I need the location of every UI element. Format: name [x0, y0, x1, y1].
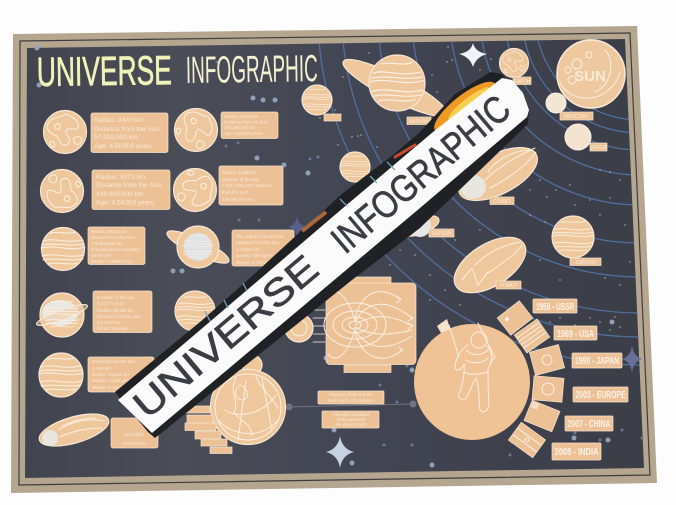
- planet: mid banded: [340, 152, 370, 182]
- comet lower: COMET: [499, 283, 518, 289]
- row 3 right: saturn and facts: Density: 687 kg/m³: [236, 253, 273, 258]
- tube printed orange planet: [428, 74, 502, 140]
- space agency year labels: 2008 - INDIA: [554, 447, 598, 458]
- space agency year labels: 2003 - EUROPE: [576, 390, 626, 401]
- row 5 left: neptune and facts: Density: 1,638 g/cm³: [92, 378, 133, 383]
- row 4 left: ringed planet and facts: Radius: 25,362 km: [97, 308, 134, 313]
- row 4 left: ringed planet and facts: [35, 291, 152, 337]
- row 1 right: planet and facts: Age: 4.503E9 years: [224, 131, 263, 136]
- row 2 right: mars and facts: Duration of the day:: [222, 177, 260, 182]
- planet: saturn small: SATURN: [431, 231, 452, 237]
- comet bottom left and facts: [36, 408, 158, 452]
- row 5 left: neptune and facts: Distance from the Sun:: [92, 359, 137, 364]
- space agency year labels: 1969 - USA: [557, 329, 594, 340]
- row 1 left: planet and facts: Distance from the Sun:: [94, 126, 161, 133]
- row 3 left: jupiter and facts: [41, 227, 145, 270]
- row 3 left: jupiter and facts: 778,500,000 km: [91, 241, 123, 246]
- row 2 right: mars and facts: 1 Sol | 106 | 687 distance: [222, 183, 272, 188]
- title: INFOGRAPHIC: [186, 48, 318, 92]
- row 2 left: earth and facts: [40, 170, 170, 214]
- sun: SUN: [574, 68, 606, 85]
- planet: jupiter right: [552, 216, 601, 266]
- planet: mercury: MERCURY: [564, 114, 590, 120]
- row 4 left: ringed planet and facts: 0 d 17 h 14 m: [97, 301, 124, 306]
- row 2 left: earth and facts: Radius: 6371 km: [96, 174, 146, 181]
- row 1 left: planet and facts: [44, 110, 168, 154]
- row 4 left: ringed planet and facts: Duration of the day:: [97, 295, 135, 300]
- planet: saturn large: SATURN: [409, 119, 429, 125]
- planet: venus: VENUS: [590, 145, 608, 151]
- row 5 left: neptune and facts: Radius: 24,622 km: [92, 372, 129, 377]
- rolled poster tube: [115, 72, 529, 438]
- row 1 left: planet and facts: Age: 4.503E9 years: [94, 143, 153, 150]
- row 2 left: earth and facts: Distance from the Sun:: [96, 182, 163, 189]
- row 1 right: planet and facts: Radius: 6,052 km: [224, 114, 259, 119]
- planet: jupiter right: JUPITER: [575, 260, 596, 266]
- caption labels center: Van Allen radiation: [333, 412, 370, 417]
- row 1 right: planet and facts: 108,200,000 km: [224, 125, 256, 130]
- title: UNIVERSE: [36, 47, 172, 95]
- moon globe and stacked labels: [185, 355, 286, 454]
- row 2 right: mars and facts: 228,000,000 km: [222, 197, 254, 202]
- comet lower: [445, 226, 535, 304]
- tube text: UNIVERSE: UNIVERSE: [126, 248, 327, 427]
- row 5 left: neptune and facts: 4,4E9 km: [92, 366, 111, 371]
- planet: mercury: [546, 93, 593, 120]
- magnetosphere panel: [313, 277, 416, 372]
- caption labels center: belts surround: [337, 417, 365, 422]
- small ringed circle: [285, 314, 313, 342]
- planet: saturn small: [398, 212, 454, 240]
- planet: earth: [500, 48, 531, 85]
- space agency flags: [497, 301, 565, 458]
- planet: earth: EARTH: [514, 79, 531, 85]
- row 3 right: saturn and facts: Distance from the Sun:: [236, 240, 281, 245]
- row 4 left: ringed planet and facts: 2,871E9 km: [97, 320, 121, 325]
- row 2 right: mars and facts: from the Sun:: [222, 190, 248, 195]
- row 5 left: neptune and facts: Weight: 1.02E26 kg: [92, 385, 131, 390]
- connector line between globe and caption: [286, 400, 416, 410]
- row 4 middle: small planet: [175, 291, 215, 331]
- caption labels center: [318, 391, 384, 428]
- row 1 right: planet and facts: Distance from the Sun:: [224, 120, 269, 124]
- star: blue sparkle: [326, 436, 354, 468]
- row 4 left: ringed planet and facts: Period: 84 years: [97, 326, 130, 331]
- row 3 right: saturn and facts: [164, 225, 294, 269]
- caption labels center: the planet Earth: [335, 422, 367, 427]
- row 3 left: jupiter and facts: 24.79 m/s²: [91, 253, 112, 258]
- row 3 left: jupiter and facts: Gravitational acceleration:: [91, 247, 142, 252]
- comet bottom left and facts: 1KGA9DC: [124, 432, 144, 437]
- star: purple sparkle left: [288, 216, 306, 238]
- comet bottom left and facts: AS31F0T2D: [122, 441, 146, 446]
- caption labels center: Solar wind and radiation: [327, 398, 375, 403]
- caption labels center: Magnetic field of Earth: [329, 392, 373, 397]
- space agency year labels: 1990 - JAPAN: [575, 356, 619, 367]
- comet upper right: COMET: [493, 199, 511, 205]
- sun: [557, 40, 625, 108]
- solar system orbits: [318, 40, 640, 366]
- row 2 right: mars and facts: Radius: 3,389 km: [222, 170, 257, 175]
- star: purple sparkle right: [622, 345, 642, 373]
- row 2 left: earth and facts: 149,600,000 km: [96, 191, 144, 198]
- space agency year labels: 1959 - USSR: [536, 302, 574, 313]
- row 3 left: jupiter and facts: Weight: 1.898E27 kg: [91, 259, 132, 264]
- row 2 left: earth and facts: Age: 4.543E9 years: [96, 200, 155, 206]
- tube text: INFOGRAPHIC: INFOGRAPHIC: [324, 88, 519, 262]
- row 2 right: mars and facts: [174, 166, 283, 213]
- row 3 left: jupiter and facts: Distance from the Sun:: [91, 235, 136, 240]
- space agency year labels: 2007 - CHINA: [568, 419, 610, 430]
- comet upper right: [451, 137, 545, 211]
- row 3 left: jupiter and facts: Radius: 69,911 km: [91, 229, 128, 234]
- planet: jupiter small: [302, 85, 341, 121]
- planet: venus: [565, 124, 608, 151]
- row 1 left: planet and facts: 57,910,000 km: [94, 134, 138, 141]
- planet: saturn large: [338, 51, 452, 125]
- row 1 left: planet and facts: Radius: 2440 km: [94, 117, 144, 124]
- big moon with astronaut: [414, 319, 530, 440]
- star: white sparkle: [459, 43, 487, 67]
- row 3 right: saturn and facts: Weight: 5.7E26 kg: [236, 260, 272, 265]
- space agency year labels: [533, 299, 628, 460]
- row 4 left: ringed planet and facts: Distance from the Sun:: [97, 314, 142, 319]
- row 5 left: neptune and facts: [39, 353, 154, 397]
- row 1 right: planet and facts: [173, 105, 278, 152]
- row 3 right: saturn and facts: 1,433E9 km: [236, 247, 260, 252]
- star dots: [37, 47, 642, 465]
- row 3 right: saturn and facts: The radius of 58,232 km: [236, 234, 284, 239]
